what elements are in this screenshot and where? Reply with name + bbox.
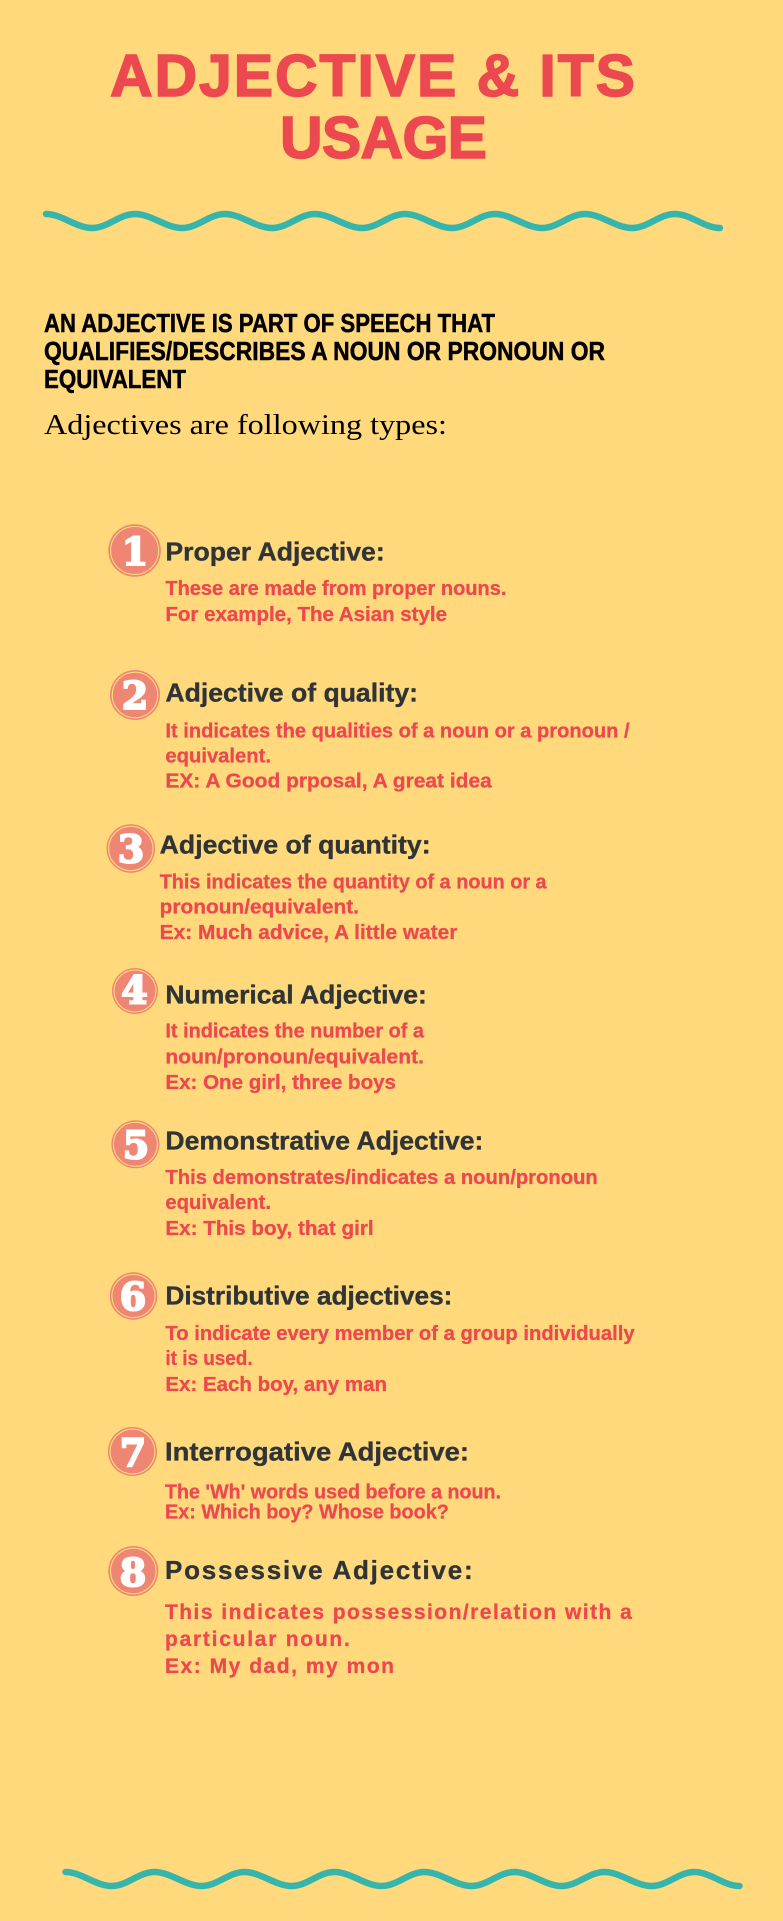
heading 3: Adjective of quantity:	[160, 829, 431, 859]
number badge 3: 3	[118, 826, 144, 872]
description 2: EX: A Good prposal, A great idea	[165, 770, 492, 793]
number badge 6: 6	[120, 1274, 146, 1319]
description 5: equivalent.	[165, 1191, 271, 1214]
number badge 7	[108, 1427, 157, 1476]
number badge 1: 1	[122, 529, 148, 574]
description 4: noun/pronoun/equivalent.	[165, 1045, 424, 1068]
intro line: Adjectives are following types:	[44, 409, 447, 441]
description 4: Ex: One girl, three boys	[165, 1071, 396, 1094]
description 3: This indicates the quantity of a noun or a	[160, 870, 547, 893]
title: ADJECTIVE & ITS	[110, 43, 635, 109]
description 5: This demonstrates/indicates a noun/pronoun	[165, 1166, 598, 1189]
number badge 8: 8	[120, 1550, 146, 1595]
number badge 1	[108, 524, 161, 577]
item 8: possessive adjective	[108, 1546, 632, 1678]
title	[110, 43, 635, 171]
item 6: distributive adjectives	[110, 1272, 635, 1396]
description 3: Ex: Much advice, A little water	[160, 921, 457, 944]
heading 7: Interrogative Adjective:	[165, 1437, 469, 1467]
bottom wave divider	[66, 1872, 740, 1886]
item 1: proper adjective	[108, 524, 506, 626]
description 5: Ex: This boy, that girl	[165, 1217, 374, 1240]
description 2: It indicates the qualities of a noun or a pronoun /	[165, 719, 630, 742]
number badge 2: 2	[122, 673, 148, 718]
item 3: adjective of quantity	[106, 824, 547, 944]
heading 8: Possessive Adjective:	[165, 1555, 473, 1585]
description 3	[160, 870, 547, 944]
description 8: particular noun.	[165, 1628, 350, 1651]
number badge 5	[111, 1120, 159, 1168]
description 7	[165, 1480, 501, 1523]
number badge 4: 4	[121, 968, 148, 1012]
heading 1: Proper Adjective:	[165, 537, 385, 567]
description 2: equivalent.	[165, 744, 271, 767]
description 8	[165, 1601, 632, 1678]
definition text	[44, 308, 605, 394]
top wave divider	[46, 214, 720, 228]
description 6: Ex: Each boy, any man	[165, 1373, 387, 1396]
description 8: This indicates possession/relation with a	[165, 1601, 632, 1624]
number badge 6	[110, 1272, 157, 1320]
definition text: EQUIVALENT	[44, 364, 186, 394]
number badge 4	[112, 968, 158, 1014]
description 6: it is used.	[165, 1347, 253, 1370]
heading 5: Demonstrative Adjective:	[165, 1125, 483, 1155]
description 5	[165, 1166, 598, 1240]
description 3: pronoun/equivalent.	[160, 895, 359, 918]
description 4	[165, 1020, 425, 1094]
title: USAGE	[280, 105, 487, 171]
description 2	[165, 719, 630, 793]
description 8: Ex: My dad, my mon	[165, 1655, 394, 1678]
number badge 5: 5	[123, 1122, 149, 1168]
heading 6: Distributive adjectives:	[165, 1280, 452, 1310]
definition text: QUALIFIES/DESCRIBES A NOUN OR PRONOUN OR	[44, 336, 605, 366]
number badge 7: 7	[120, 1430, 146, 1475]
description 4: It indicates the number of a	[165, 1020, 425, 1043]
description 7: Ex: Which boy? Whose book?	[165, 1500, 449, 1523]
item 7: interrogative adjective	[108, 1427, 501, 1523]
number badge 2	[110, 670, 160, 720]
heading 2: Adjective of quality:	[165, 678, 418, 708]
number badge 3	[106, 824, 155, 873]
description 6	[165, 1322, 635, 1396]
item 4: numerical adjective	[112, 968, 427, 1094]
definition text: AN ADJECTIVE IS PART OF SPEECH THAT	[44, 308, 495, 338]
number badge 8	[108, 1546, 158, 1596]
item 2: adjective of quality	[110, 670, 630, 793]
description 6: To indicate every member of a group individually	[165, 1322, 635, 1345]
item 5: demonstrative adjective	[111, 1120, 598, 1240]
description 1: For example, The Asian style	[165, 603, 447, 626]
description 7: The 'Wh' words used before a noun.	[165, 1480, 501, 1503]
description 1: These are made from proper nouns.	[165, 577, 506, 600]
heading 4: Numerical Adjective:	[165, 979, 427, 1009]
description 1	[165, 577, 506, 626]
